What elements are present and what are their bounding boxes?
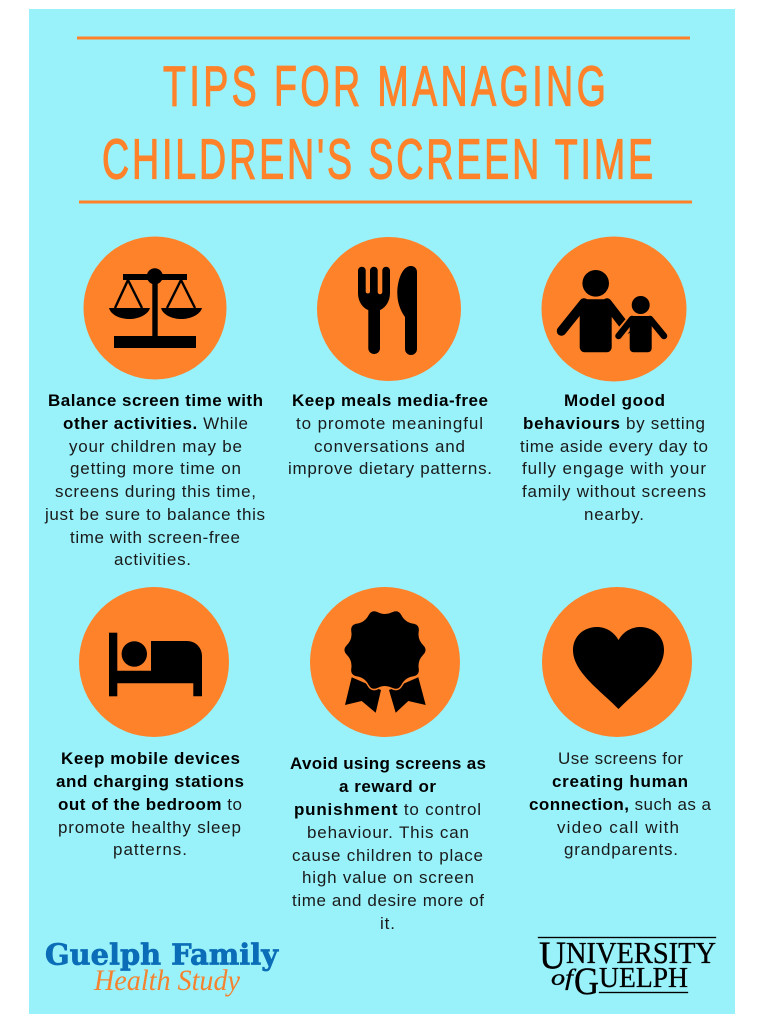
text: rewards tip: Avoid using screens as (290, 754, 486, 773)
text: bedroom tip: Keep mobile devices (61, 749, 240, 768)
text: balance tip: getting more time on (70, 459, 241, 478)
text: rewards tip: cause children to place (292, 846, 483, 865)
logo: Guelph Family Health Study (45, 938, 279, 997)
panel: bedroom devices (56, 587, 244, 859)
text: rewards tip (290, 754, 486, 933)
text: balance tip: time with screen-free (70, 528, 240, 547)
text: connection tip: connection, such as a (529, 795, 712, 814)
text: behaviours tip: Model good (564, 391, 665, 410)
text: behaviours tip (520, 391, 708, 524)
text: rewards tip: behaviour. This can (307, 823, 469, 842)
text: behaviours tip: behaviours by setting (523, 414, 705, 433)
text: balance tip: other activities. While (63, 414, 248, 433)
text: rewards tip: it. (380, 914, 395, 933)
text: behaviours tip: family without screens (522, 482, 706, 501)
text: balance tip (44, 391, 265, 569)
logo: University of Guelph: of (551, 965, 577, 990)
text: balance tip: your children may be (69, 437, 242, 456)
logo: University of Guelph: U (539, 934, 566, 977)
panel: media-free meals (288, 237, 492, 478)
logo: University of Guelph: UELPH (599, 962, 688, 994)
icon: fork and knife (317, 237, 461, 381)
panel: model good behaviours (520, 236, 708, 524)
text: balance tip: just be sure to balance this (44, 505, 265, 524)
text: rewards tip: high value on screen (302, 868, 474, 887)
title (77, 36, 692, 204)
title: CHILDREN'S SCREEN TIME (102, 128, 653, 191)
text: connection tip: Use screens for (558, 749, 683, 768)
text: rewards tip: time and desire more of (292, 891, 484, 910)
text: meals tip: to promote meaningful (296, 414, 483, 433)
text: meals tip (288, 391, 492, 478)
text: connection tip: creating human (552, 772, 688, 791)
icon: heart (542, 587, 692, 737)
text: rewards tip: a reward or (339, 777, 436, 796)
logo: University of Guelph: G (574, 960, 599, 1003)
logo: Guelph Family Health Study: Guelph Family (45, 938, 279, 972)
text: connection tip (529, 749, 712, 859)
panel: balance screen time (44, 236, 265, 569)
text: behaviours tip: time aside every day to (520, 437, 708, 456)
text: rewards tip: punishment to control (294, 800, 481, 819)
title: TIPS FOR MANAGING (163, 55, 606, 118)
text: bedroom tip: patterns. (113, 840, 187, 859)
text: balance tip: Balance screen time with (48, 391, 263, 410)
logo: University of Guelph: NIVERSITY (566, 935, 716, 970)
icon: parent and child (542, 236, 686, 382)
text: connection tip: grandparents. (564, 840, 678, 859)
panel: human connection (529, 587, 712, 859)
text: balance tip: activities. (114, 550, 191, 569)
text: balance tip: screens during this time, (55, 482, 256, 501)
text: connection tip: video call with (557, 818, 679, 837)
icon: award ribbon (310, 587, 460, 737)
text: behaviours tip: fully engage with your (522, 459, 706, 478)
text: bedroom tip (56, 749, 244, 859)
logo: University of Guelph (538, 934, 716, 1003)
text: bedroom tip: and charging stations (56, 772, 244, 791)
icon: bed (79, 587, 229, 737)
text: bedroom tip: out of the bedroom to (58, 795, 242, 814)
text: behaviours tip: nearby. (584, 505, 644, 524)
text: meals tip: Keep meals media-free (292, 391, 488, 410)
text: meals tip: conversations and (314, 437, 465, 456)
text: bedroom tip: promote healthy sleep (58, 818, 241, 837)
icon: balance scales (84, 236, 226, 380)
panel: no screen rewards (290, 587, 486, 933)
logo: Guelph Family Health Study: Health Study (93, 964, 241, 997)
text: meals tip: improve dietary patterns. (288, 459, 492, 478)
